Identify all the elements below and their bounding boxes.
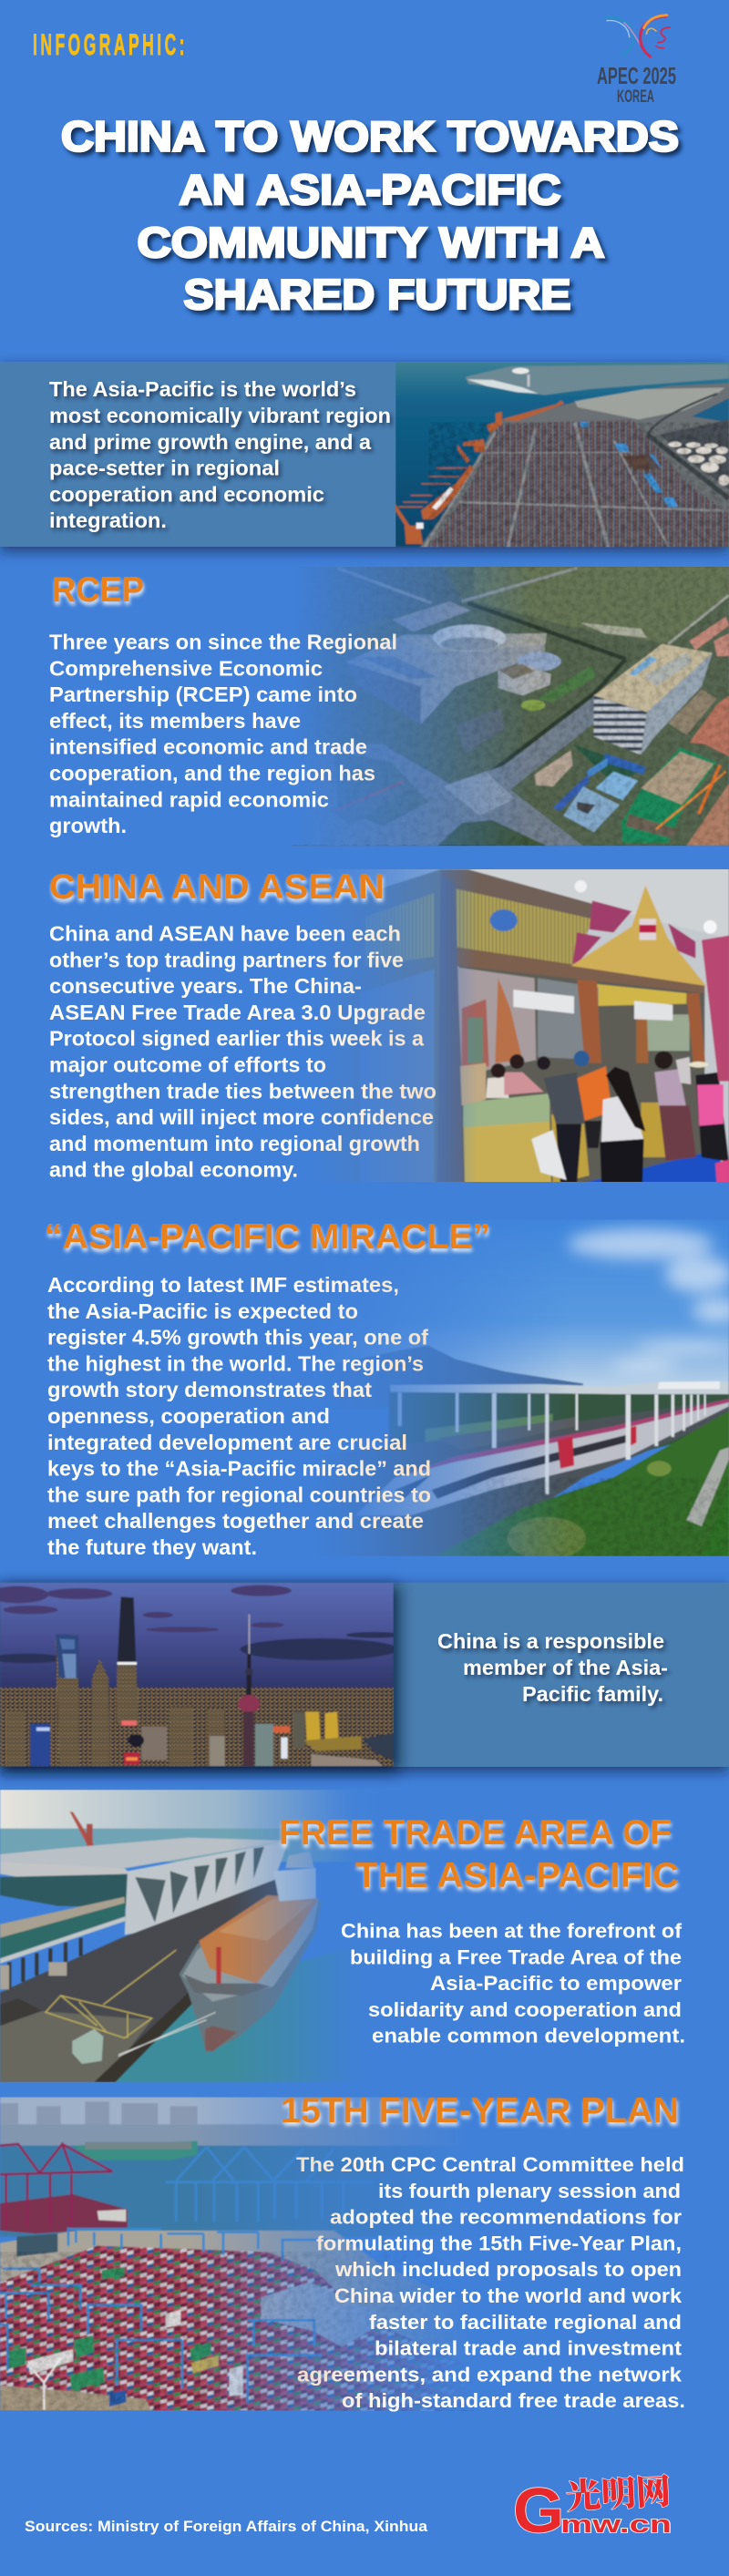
text: RCEP: cooperation, and the region has [49,762,375,785]
fade overlay [292,567,729,845]
title [61,113,679,318]
text: 15th Five-Year Plan: which included proposals to open [334,2258,682,2281]
text: China is a responsible member: member of the Asia- [463,1656,668,1679]
logo: Guangming Online: mw.cn [560,2510,672,2538]
text: Asia-Pacific miracle: integrated development are crucial [47,1431,407,1454]
heading: Free Trade Area of the Asia-Pacific: FREE TRADE AREA OF [279,1813,672,1852]
text: intro [49,377,391,532]
text: Free Trade Area [341,1919,685,2047]
text: 15th Five-Year Plan: agreements, and expand the network [297,2363,683,2386]
text: Asia-Pacific miracle: According to latest IMF estimates, [47,1273,399,1297]
text: Free Trade Area: Asia-Pacific to empower [430,1972,682,1995]
logo: Guangming Online: 光明网 [565,2463,672,2519]
text: intro: most economically vibrant region [49,404,391,427]
text: Free Trade Area: China has been at the forefront of [341,1919,683,1943]
photo: aerial RCEP industrial park [292,565,729,847]
text: 15th Five-Year Plan: bilateral trade and investment [375,2337,683,2360]
text: 15th Five-Year Plan: The 20th CPC Central Committee held [296,2153,684,2176]
panel: responsible member with skyline [0,1582,729,1771]
text: China is a responsible member: Pacific family. [522,1682,663,1706]
logo: APEC 2025 Korea [597,15,676,107]
text: RCEP: growth. [49,814,127,837]
text: RCEP: intensified economic and trade [49,735,367,759]
section: Asia-Pacific miracle [45,1217,729,1560]
text: Asia-Pacific miracle: the future they want. [47,1535,257,1559]
text: RCEP: Partnership (RCEP) came into [49,682,357,706]
photo: aerial container port [395,362,729,548]
text: intro: The Asia-Pacific is the world’s [49,377,356,401]
text: Asia-Pacific miracle: growth story demonstrates that [47,1378,372,1401]
text: Free Trade Area: solidarity and cooperation and [368,1998,682,2021]
text: China and ASEAN: sides, and will inject more confidence [49,1105,434,1129]
text: intro: pace-setter in regional [49,456,280,479]
text: intro: cooperation and economic [49,483,324,507]
text: China and ASEAN: strengthen trade ties between the two [49,1079,436,1103]
title: AN ASIA-PACIFIC [179,166,561,213]
sources: Sources: Ministry of Foreign Affairs of China, Xinhua [25,2519,428,2535]
photo: container yard with cranes [0,2097,474,2411]
title: COMMUNITY WITH A [137,219,605,266]
text: Free Trade Area: enable common development. [372,2025,685,2047]
text: 15th Five-Year Plan: faster to facilitate regional and [369,2311,682,2334]
heading: Free Trade Area of the Asia-Pacific [279,1813,679,1895]
text: 15th Five-Year Plan: its fourth plenary session and [378,2180,681,2202]
text: China is a responsible member: China is a responsible [437,1629,664,1653]
text: China and ASEAN: consecutive years. The China- [49,974,362,998]
logo: Guangming Online [513,2463,672,2546]
photo: cruise terminal and container ship [0,1790,383,2082]
heading: 15th Five-Year Plan: 15TH FIVE-YEAR PLAN [281,2091,679,2130]
text: Free Trade Area: building a Free Trade Area of the [350,1945,682,1968]
title: SHARED FUTURE [184,271,570,318]
text: 15th Five-Year Plan: adopted the recommendations for [330,2206,682,2229]
text: RCEP: Comprehensive Economic [49,656,323,680]
text: China and ASEAN: Protocol signed earlier this week is a [49,1027,425,1051]
text: Asia-Pacific miracle: the sure path for regional countries to [47,1483,431,1506]
text: China and ASEAN [49,922,436,1182]
logo: APEC 2025 Korea: KOREA [617,87,654,107]
logo: APEC 2025 Korea: APEC 2025 [597,62,676,89]
section: RCEP [49,565,729,847]
fade overlay [0,2097,474,2410]
text: China and ASEAN: major outcome of efforts to [49,1053,326,1077]
text: Asia-Pacific miracle: the Asia-Pacific is expected to [47,1299,358,1323]
text: RCEP: maintained rapid economic [49,787,329,811]
panel: intro with port photo [0,362,729,548]
text: 15th Five-Year Plan: formulating the 15th Five-Year Plan, [316,2232,682,2254]
text: intro: integration. [49,508,167,532]
section: 15th Five-Year Plan [0,2091,685,2412]
text: China and ASEAN: other’s top trading partners for five [49,948,404,971]
text: 15th Five-Year Plan: China wider to the world and work [334,2284,683,2307]
text: 15th Five-Year Plan: of high-standard free trade areas. [342,2389,685,2412]
text: China and ASEAN: China and ASEAN have been each [49,922,401,946]
fade overlay [0,1790,383,2082]
text: 15th Five-Year Plan [296,2153,685,2412]
photo: high-speed train [310,1219,729,1560]
text: Asia-Pacific miracle: register 4.5% growth this year, one of [47,1326,428,1350]
photo: Thailand trade expo booth [310,866,729,1185]
section: China and ASEAN [49,866,729,1185]
text: Asia-Pacific miracle: the highest in the world. The region’s [47,1351,424,1375]
text: RCEP: effect, its members have [49,709,301,733]
text: China and ASEAN: and momentum into regional growth [49,1132,420,1155]
text: Asia-Pacific miracle [47,1273,431,1559]
text: China and ASEAN: ASEAN Free Trade Area 3.0 Upgrade [49,1001,426,1024]
text: Asia-Pacific miracle: keys to the “Asia-Pacific miracle” and [47,1457,431,1481]
fade overlay [310,1219,729,1556]
heading: RCEP: RCEP [52,570,144,610]
heading: China and ASEAN: CHINA AND ASEAN [49,867,385,907]
section: Free Trade Area of the Asia-Pacific [0,1790,685,2082]
heading: Asia-Pacific miracle: “ASIA-PACIFIC MIRACLE” [45,1217,490,1257]
text: Asia-Pacific miracle: openness, cooperation and [47,1404,330,1428]
text: RCEP: Three years on since the Regional [49,631,397,654]
fade overlay [310,869,729,1182]
heading: Free Trade Area of the Asia-Pacific: THE ASIA-PACIFIC [355,1856,679,1895]
text: intro: and prime growth engine, and a [49,430,372,454]
text: China is a responsible member [437,1629,668,1706]
title: CHINA TO WORK TOWARDS [61,113,679,160]
text: Asia-Pacific miracle: meet challenges together and create [47,1509,424,1533]
text: China and ASEAN: and the global economy. [49,1158,298,1182]
text: RCEP [49,631,397,837]
photo: Shanghai skyline at dusk [0,1583,401,1768]
logo: Guangming Online: G [513,2475,564,2546]
label: infographic: INFOGRAPHIC: [33,28,188,61]
